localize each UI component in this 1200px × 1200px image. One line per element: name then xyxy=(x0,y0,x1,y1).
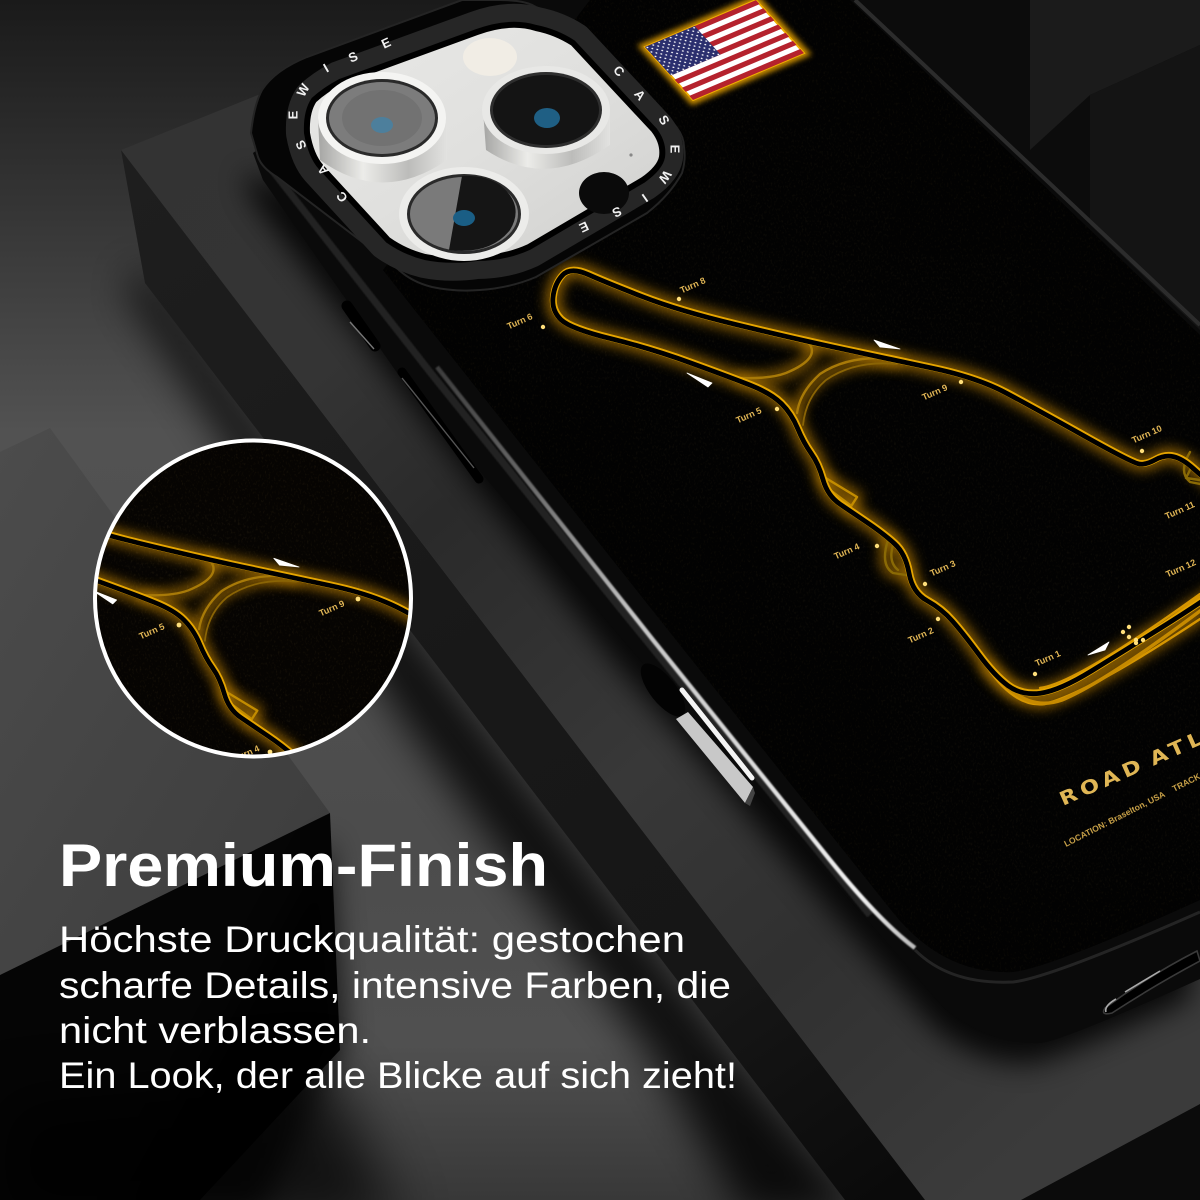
background: top right dark area xyxy=(850,0,1200,340)
background: corner under pedestal xyxy=(1021,1104,1200,1200)
side button long xyxy=(402,372,479,479)
inset: magnified track detail xyxy=(93,438,413,758)
CASEWISE lettering right: I xyxy=(639,191,651,205)
turn labels: Turn 6 xyxy=(505,311,534,331)
turn labels: Turn 11 xyxy=(1163,499,1196,521)
phone body xyxy=(253,0,1200,1043)
camera bump xyxy=(251,0,685,291)
turn labels: Turn 1 xyxy=(1033,648,1062,668)
turn labels: Turn 5 xyxy=(734,405,763,425)
CASEWISE lettering left xyxy=(286,34,393,205)
heading: Premium-Finish xyxy=(59,832,548,899)
CASEWISE lettering left: E xyxy=(286,110,300,119)
camera module xyxy=(251,0,685,291)
bottom rim xyxy=(915,912,1200,982)
background: pedestal side face xyxy=(121,150,925,1200)
CASEWISE lettering left: S xyxy=(346,48,360,66)
CASEWISE lettering right: W xyxy=(655,168,675,187)
inset track: Turn 9 xyxy=(317,598,346,618)
background: lower left block xyxy=(0,428,400,1200)
CASEWISE lettering left: S xyxy=(292,138,310,152)
rim highlight xyxy=(437,367,915,948)
icon: USA flag xyxy=(645,0,804,100)
turn labels: Turn 10 xyxy=(1130,423,1163,445)
inset border xyxy=(95,440,411,756)
turn labels: Turn 8 xyxy=(678,275,707,295)
phone right edge xyxy=(855,0,1200,325)
charging port xyxy=(1104,951,1200,1014)
CASEWISE lettering left: E xyxy=(379,34,393,52)
back plate xyxy=(383,0,1200,972)
camera glass inner edge xyxy=(307,25,662,260)
body text: nicht verblassen. xyxy=(59,1009,371,1051)
CASEWISE lettering right: C xyxy=(610,62,628,80)
turn labels: Turn 3 xyxy=(928,558,957,578)
inset track: Turn 4 xyxy=(232,743,261,763)
lens top left xyxy=(318,72,447,182)
turn labels: Turn 2 xyxy=(906,625,935,645)
side button upper xyxy=(347,306,375,349)
silver side button xyxy=(633,657,755,806)
small sensor dot xyxy=(629,153,633,157)
CASEWISE lettering right: A xyxy=(631,87,649,104)
CASEWISE lettering right: S xyxy=(655,112,673,128)
CASEWISE lettering left: A xyxy=(314,161,332,178)
body text: scharfe Details, intensive Farben, die xyxy=(59,964,731,1006)
body text: Ein Look, der alle Blicke auf sich zieht! xyxy=(59,1054,737,1096)
lens bottom xyxy=(399,167,529,261)
CASEWISE lettering right: S xyxy=(610,203,624,221)
inset track xyxy=(97,521,409,754)
CASEWISE lettering right xyxy=(577,62,682,236)
CASEWISE lettering left: W xyxy=(293,80,313,99)
turn labels xyxy=(505,275,1197,668)
lens top right xyxy=(482,66,610,169)
inset track: Turn 5 xyxy=(137,621,166,641)
microphone hole xyxy=(579,172,629,214)
turn labels: Turn 9 xyxy=(920,382,949,402)
lettering ring xyxy=(307,25,662,260)
CASEWISE lettering left: C xyxy=(333,188,351,205)
turn labels: Turn 4 xyxy=(832,541,861,561)
body text: Höchste Druckqualität: gestochen xyxy=(59,918,685,960)
body text xyxy=(59,918,737,1096)
inset texture xyxy=(98,443,406,753)
race track xyxy=(553,270,1200,704)
flash xyxy=(463,38,517,76)
phone shadow xyxy=(243,173,1190,1063)
CASEWISE lettering left: I xyxy=(321,61,331,75)
back plate texture xyxy=(380,0,1200,980)
circuit location line: LOCATION: Braselton, USA TRACK xyxy=(1062,771,1200,849)
track markers xyxy=(541,297,1145,676)
bumper gloss band xyxy=(272,170,870,915)
CASEWISE lettering right: E xyxy=(668,145,682,154)
turn labels: Turn 12 xyxy=(1164,557,1197,579)
background: pedestal block shadow xyxy=(128,267,860,1200)
inset disc xyxy=(95,440,411,756)
phone xyxy=(253,0,1200,1043)
CASEWISE lettering right: E xyxy=(577,218,591,236)
